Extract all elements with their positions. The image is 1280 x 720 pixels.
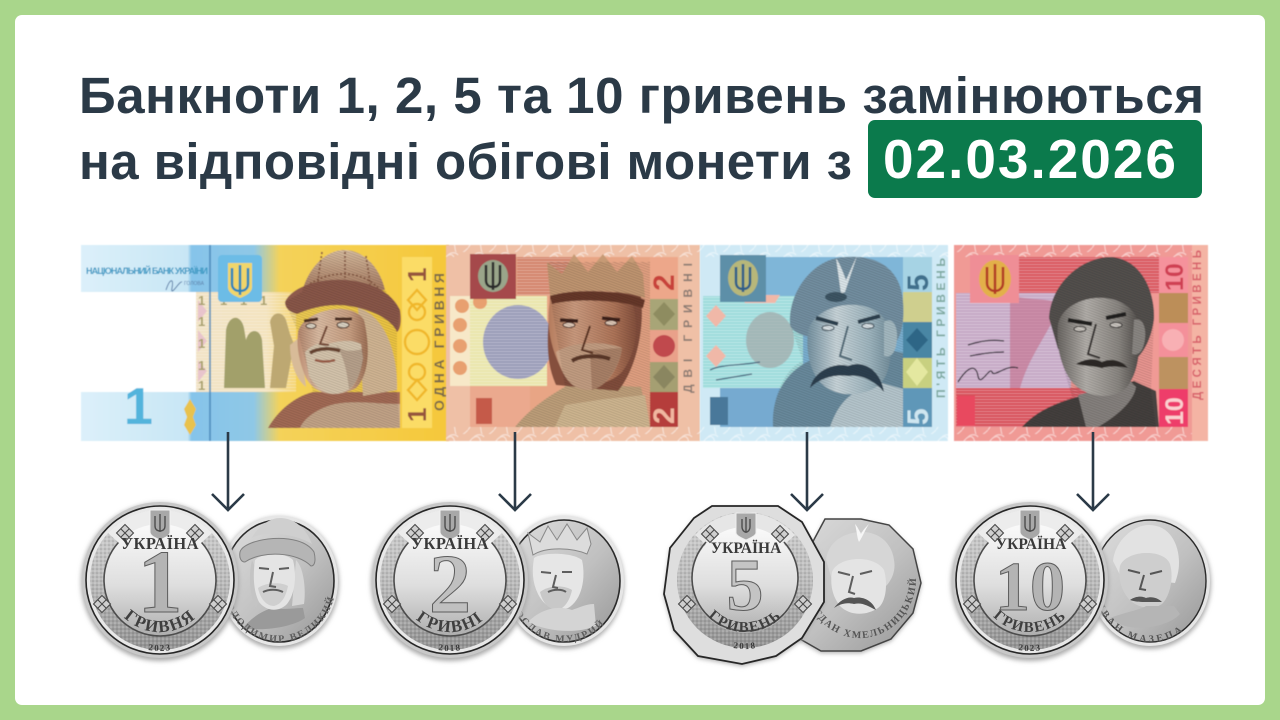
date badge: 02.03.2026 xyxy=(883,128,1176,190)
coin obverse: 1: УКРАЇНА xyxy=(121,534,199,553)
banknote: 1 hryvnia: 1 xyxy=(240,293,247,308)
portrait: Mazepa xyxy=(1022,257,1159,427)
coin obverse: 10 xyxy=(948,500,1110,664)
coin reverse: Yaroslav: ЯРОСЛАВ МУДРИЙ xyxy=(518,612,604,644)
banknote: 1 hryvnia: 1 xyxy=(260,293,267,308)
coin reverse: Mazepa: ІВАН МАЗЕПА xyxy=(1101,604,1182,642)
bank name on note 1: НАЦІОНАЛЬНИЙ БАНК УКРАЇНИ xyxy=(86,265,208,276)
value column on note 3: 5 xyxy=(902,408,935,425)
banknote: 1 hryvnia: ОДНА ГРИВНЯ xyxy=(431,273,447,411)
title xyxy=(79,67,1204,190)
coins: 10 hryvnias xyxy=(948,500,1214,664)
coin obverse: 10: УКРАЇНА xyxy=(996,536,1067,553)
shield on note 1 xyxy=(218,255,262,302)
coin reverse: Mazepa xyxy=(1098,514,1214,652)
banknote: 1 hryvnia: 1 xyxy=(124,378,153,436)
portrait: Yaroslav xyxy=(515,254,650,427)
date badge xyxy=(868,120,1202,198)
arrow: 1 hryvnia xyxy=(212,432,244,510)
arrow: 10 hryvnias xyxy=(1077,432,1109,510)
coin reverse: Volodymyr xyxy=(228,514,342,652)
value column on note 4: 10 xyxy=(1161,263,1189,291)
coins: 1 hryvnia xyxy=(78,500,342,664)
coin obverse: 5: ГРИВЕНЬ xyxy=(708,609,780,632)
banknote: 1 hryvnia: 1 xyxy=(198,358,205,373)
banknote: 1 hryvnia: 1 xyxy=(198,293,205,308)
coin reverse: Bohdan: БОГДАН ХМЕЛЬНИЦЬКИЙ xyxy=(816,578,916,638)
portrait: Bohdan xyxy=(773,256,904,427)
value column on note 2 xyxy=(648,257,681,427)
coin reverse: Yaroslav xyxy=(516,514,627,652)
banknote: 1 hryvnia: 1 xyxy=(198,314,205,329)
arrow: 5 hryvnias xyxy=(791,432,823,510)
banknote: 2 hryvnias: ДВІ ГРИВНІ xyxy=(681,263,695,393)
coins: 2 hryvnias xyxy=(368,500,627,664)
coin obverse: 10: 2023 xyxy=(1018,644,1040,651)
banknote: 1 hryvnia: 1 xyxy=(198,378,205,393)
portrait: Volodymyr xyxy=(268,250,401,428)
banknote: 10 hryvnias: ДЕСЯТЬ ГРИВЕНЬ xyxy=(1192,250,1204,400)
coin obverse: 2: ГРИВНІ xyxy=(416,610,482,632)
coin reverse: Volodymyr: ВОЛОДИМИР ВЕЛИКИЙ xyxy=(230,596,334,642)
banknote: 1 hryvnia: 1 xyxy=(220,293,227,308)
title: Банкноти 1, 2, 5 та 10 гривень замінюються xyxy=(79,67,1204,124)
banknote: 5 hryvnias xyxy=(700,245,948,441)
banknote: 1 hryvnia: 1 xyxy=(402,408,432,422)
coin obverse: 5: 5 xyxy=(726,545,764,627)
banknote: 1 hryvnia: ГОЛОВА xyxy=(184,281,205,287)
coin obverse: 5 xyxy=(662,505,826,668)
coin reverse: Bohdan xyxy=(798,518,924,656)
coin obverse: 10: ГРИВЕНЬ xyxy=(993,609,1064,632)
value column on note 4 xyxy=(1159,257,1189,427)
coin obverse: 10: 10 xyxy=(995,549,1065,626)
shield on note 2 xyxy=(470,254,516,299)
coin obverse: 1: 2023 xyxy=(148,644,170,651)
value column on note 2: 2 xyxy=(648,274,681,291)
coin obverse: 2: 2018 xyxy=(438,644,460,651)
banknote: 2 hryvnias xyxy=(446,245,700,441)
coin obverse: 1: ГРИВНЯ xyxy=(124,609,195,632)
figures on note 1 xyxy=(224,313,294,388)
title: на відповідні обігові монети з xyxy=(79,133,852,190)
banknote: 10 hryvnias xyxy=(954,245,1208,441)
value column on note 4: 10 xyxy=(1161,397,1189,425)
coin obverse: 2: УКРАЇНА xyxy=(411,534,489,553)
shield on note 4 xyxy=(970,255,1019,303)
coins: 5 hryvnias xyxy=(662,505,924,668)
coin obverse: 2 xyxy=(368,500,530,664)
coin obverse: 5: УКРАЇНА xyxy=(711,540,782,557)
coin obverse: 1: 1 xyxy=(138,533,182,632)
arrow: 2 hryvnias xyxy=(499,432,531,510)
coin obverse: 5: 2018 xyxy=(734,642,755,650)
value column on note 2: 2 xyxy=(648,407,681,424)
value column on note 3 xyxy=(902,257,935,427)
yellow value panel xyxy=(402,257,432,428)
shield on note 3 xyxy=(720,255,766,302)
banknote: 5 hryvnias: П'ЯТЬ ГРИВЕНЬ xyxy=(934,258,948,398)
banknote: 1 hryvnia: 1 xyxy=(402,268,432,282)
banknote: 1 hryvnia: 1 xyxy=(198,336,205,351)
value column on note 3: 5 xyxy=(902,274,935,291)
banknote: 1 hryvnia xyxy=(81,245,449,441)
coin obverse: 2: 2 xyxy=(429,538,471,631)
coin obverse: 1 xyxy=(78,500,240,664)
